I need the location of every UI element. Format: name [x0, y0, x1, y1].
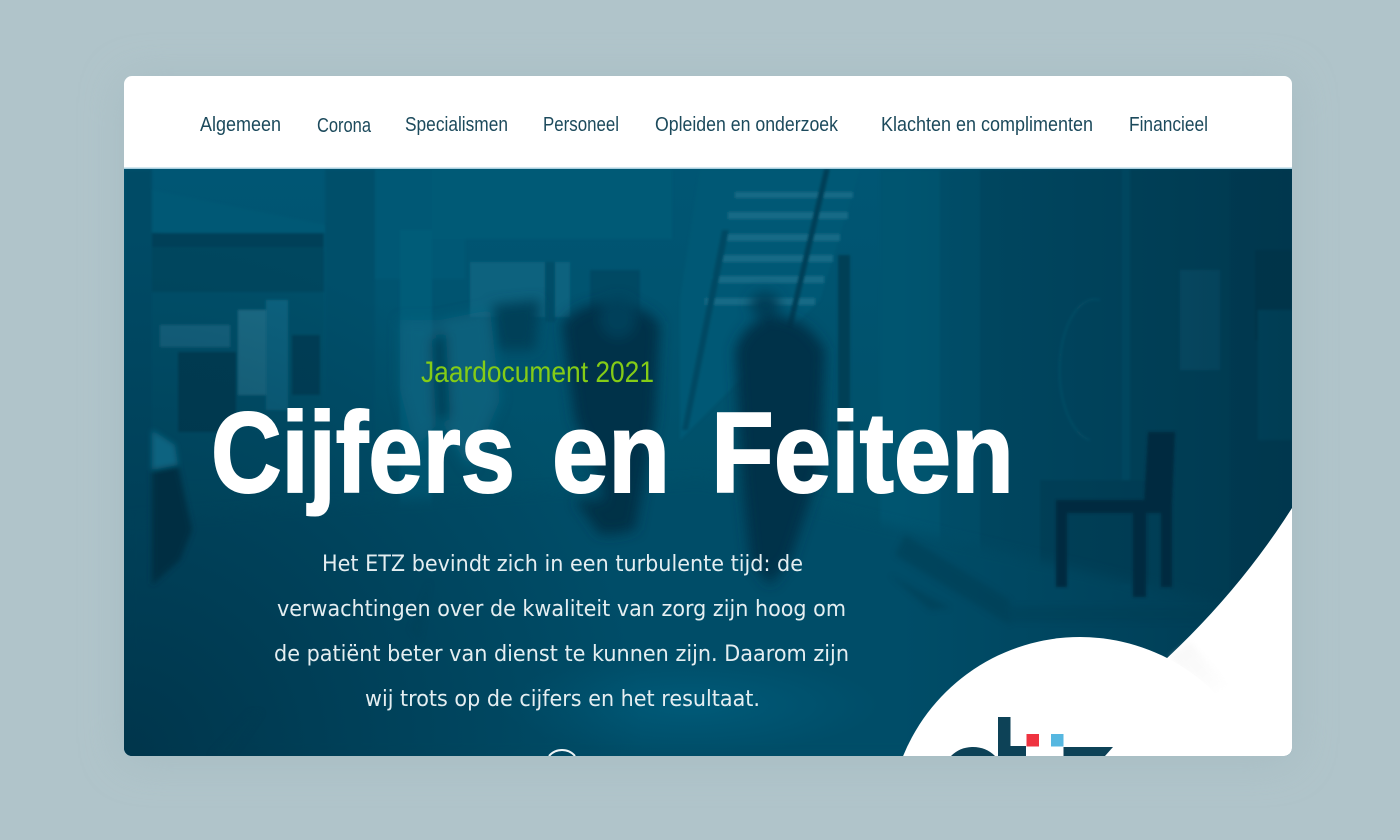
intro text block	[274, 552, 849, 712]
title: Cijfers	[211, 390, 515, 517]
nav item: Specialismen: Specialismen	[405, 114, 508, 136]
subtitle: Jaardocument 2021	[421, 356, 654, 389]
nav item: Algemeen: Algemeen	[200, 114, 281, 136]
left person with handbag	[152, 430, 192, 585]
soft grey fade in the curve	[1168, 644, 1182, 656]
title: en	[552, 390, 670, 517]
nav item: Financieel: Financieel	[1129, 114, 1208, 136]
logo: etz	[951, 717, 1113, 756]
white corner curve	[1167, 508, 1292, 756]
hero photo panel: blurred hospital hallway in teal duotone	[124, 169, 1292, 756]
floor	[124, 480, 1292, 756]
intro text block: Het ETZ bevindt zich in een turbulente tijd: de	[322, 552, 803, 577]
intro text block: wij trots op de cijfers en het resultaat.	[365, 687, 760, 712]
intro text block: verwachtingen over de kwaliteit van zorg zijn hoog om	[277, 597, 846, 622]
skirting and reflected floor wedges	[898, 539, 1006, 617]
scroll-down button	[549, 750, 575, 756]
left shop area	[238, 310, 266, 395]
white logo circle	[903, 637, 1257, 756]
card shadow	[124, 80, 1292, 760]
intro text block: de patiënt beter van dienst te kunnen zijn. Daarom zijn	[274, 642, 849, 667]
title	[211, 390, 1014, 517]
ceiling and back hall	[124, 169, 1292, 756]
nav item: Klachten en complimenten: Klachten en complimenten	[881, 114, 1093, 136]
staircase	[680, 169, 860, 440]
nav item: Corona: Corona	[317, 115, 372, 137]
chair	[1056, 432, 1175, 597]
title: Feiten	[711, 390, 1014, 517]
navigation bar	[124, 114, 1292, 169]
right glass walls	[880, 169, 940, 609]
nav item: Opleiden en onderzoek: Opleiden en onderzoek	[655, 114, 839, 136]
nav item: Personeel: Personeel	[543, 114, 619, 136]
card	[124, 76, 1292, 756]
blurred people	[400, 292, 825, 585]
